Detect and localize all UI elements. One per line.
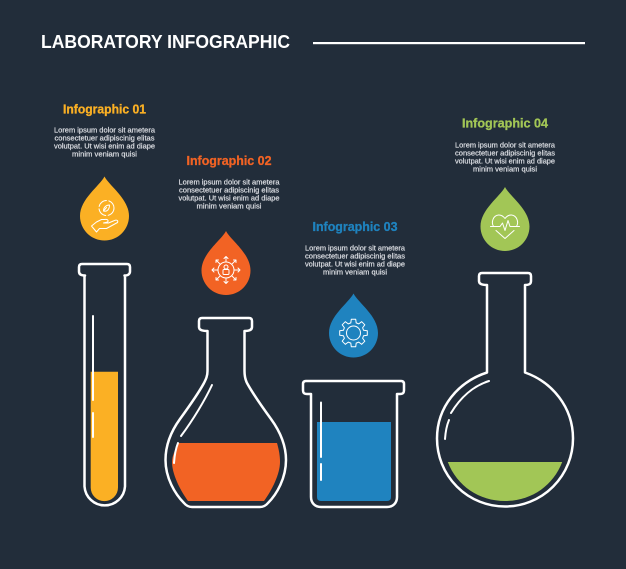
title: LABORATORY INFOGRAPHIC bbox=[41, 32, 290, 52]
tube outline bbox=[79, 264, 130, 505]
body text 02: minim veniam quisi bbox=[196, 202, 262, 210]
panel: infographic 04 text bbox=[455, 116, 556, 174]
body text 03: volutpat. Ut wisi enim ad diape bbox=[305, 260, 405, 268]
green liquid bbox=[448, 462, 562, 501]
heading 03: Infographic 03 bbox=[312, 219, 398, 234]
heading 01: Infographic 01 bbox=[63, 102, 146, 116]
body text 02: consectetuer adipiscinig elitas bbox=[179, 186, 279, 194]
conical flask bbox=[166, 318, 286, 507]
body text 01: volutpat. Ut wisi enim ad diape bbox=[54, 142, 155, 150]
body text 01: Lorem ipsum dolor sit ametera bbox=[54, 126, 156, 134]
highlights bbox=[174, 385, 212, 463]
body text 04: consectetuer adipiscinig elitas bbox=[455, 148, 555, 158]
highlights bbox=[445, 381, 489, 439]
panel: infographic 03 text bbox=[305, 219, 406, 276]
body text 04: Lorem ipsum dolor sit ametera bbox=[455, 140, 556, 150]
body text 04 bbox=[455, 140, 556, 174]
body text 03: consectetuer adipiscinig elitas bbox=[305, 252, 405, 260]
icon: yellow drop with hand and leaf bbox=[80, 176, 129, 240]
flask outline bbox=[437, 273, 573, 506]
flask outline bbox=[166, 318, 286, 507]
highlights bbox=[320, 402, 322, 480]
icon: orange drop with person and arrows bbox=[202, 231, 250, 295]
body text 03 bbox=[305, 244, 406, 276]
header rule bbox=[313, 42, 585, 44]
icon: green drop with heartbeat bbox=[480, 187, 530, 251]
body text 02: Lorem ipsum dolor sit ametera bbox=[178, 178, 280, 186]
body text 01: minim veniam quisi bbox=[72, 150, 137, 158]
beaker outline bbox=[303, 381, 404, 507]
body text 01 bbox=[54, 126, 156, 158]
test tube bbox=[79, 264, 130, 505]
panel: infographic 02 text bbox=[178, 153, 280, 210]
heading 02: Infographic 02 bbox=[186, 153, 272, 168]
blue liquid bbox=[317, 422, 391, 501]
beaker bbox=[303, 381, 404, 507]
body text 01: consectetuer adipiscinig elitas bbox=[54, 134, 155, 142]
body text 02: volutpat. Ut wisi enim ad diape bbox=[178, 194, 280, 202]
heading 04: Infographic 04 bbox=[462, 116, 549, 130]
body text 03: minim veniam quisi bbox=[323, 268, 387, 276]
icon: blue drop with gear bbox=[329, 294, 378, 358]
body text 04: volutpat. Ut wisi enim ad diape bbox=[455, 156, 555, 166]
highlights bbox=[92, 316, 94, 437]
body text 03: Lorem ipsum dolor sit ametera bbox=[305, 244, 406, 252]
yellow liquid bbox=[91, 372, 118, 501]
orange liquid bbox=[172, 443, 280, 501]
round flask bbox=[437, 273, 573, 506]
panel: infographic 01 text bbox=[54, 102, 156, 158]
body text 02 bbox=[178, 178, 280, 210]
body text 04: minim veniam quisi bbox=[473, 164, 537, 174]
